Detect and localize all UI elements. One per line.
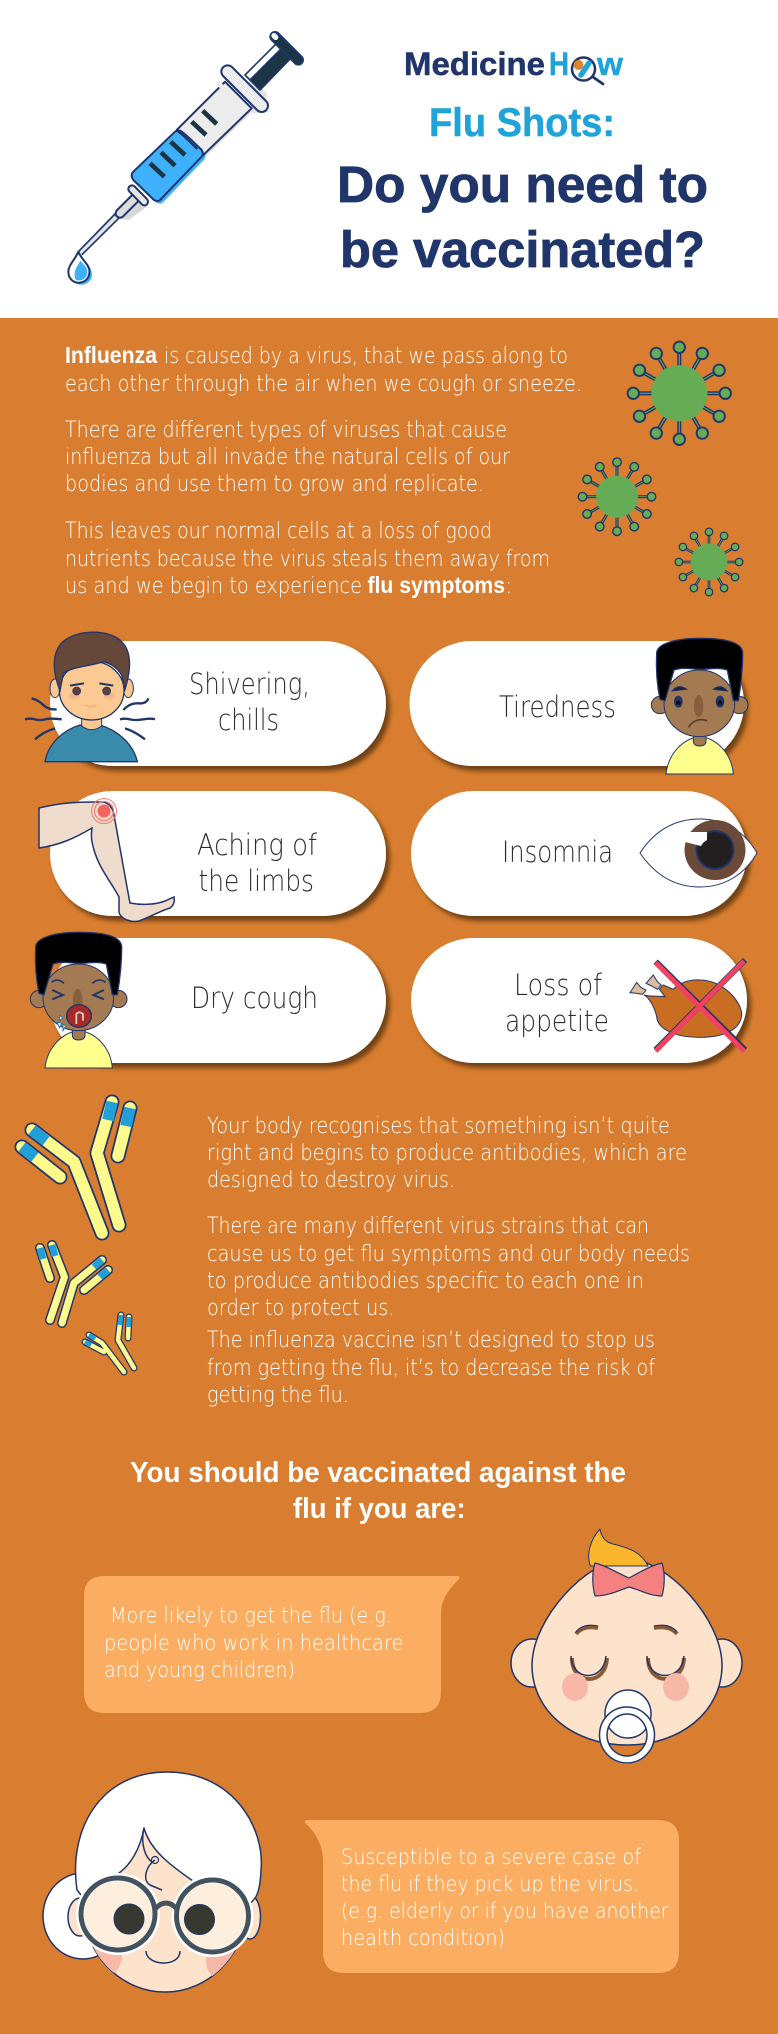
logo: MedicineHow: Medicine (404, 46, 545, 82)
hair (76, 1772, 261, 1905)
text block: antibodies and vaccine: to produce antibodies specific to each one in (207, 1268, 644, 1294)
callout: susceptible to a severe case: the flu if they pick up the virus. (341, 1872, 639, 1897)
text block: antibodies and vaccine: Your body recognises that something isn’t quite (207, 1113, 670, 1139)
heading: who should be vaccinated: You should be vaccinated against the (130, 1457, 626, 1489)
text block: antibodies and vaccine: designed to destroy virus. (207, 1167, 455, 1193)
icon: medium antibody (40, 1245, 108, 1323)
symptom: shivering, chills (25, 632, 386, 766)
symptom: shivering, chills: chills (218, 703, 279, 737)
title: be vaccinated? (340, 221, 705, 278)
logo: MedicineHow: w (596, 46, 623, 82)
symptom: insomnia (411, 791, 757, 916)
text block: antibodies and vaccine: There are many different virus strains that can (207, 1213, 649, 1239)
icon: small virus (675, 528, 743, 596)
header background (0, 0, 778, 318)
icon: baby face (511, 1529, 742, 1763)
callout: more likely to get the flu: and young children) (104, 1658, 295, 1683)
icon: elderly woman face (43, 1772, 261, 1992)
icon: shivering boy (25, 632, 155, 762)
text block: antibodies and vaccine (207, 1113, 690, 1408)
icon: large virus (628, 342, 731, 445)
callout: susceptible to a severe case: health condition) (341, 1926, 505, 1951)
text block: influenza introduction: : (505, 573, 513, 599)
heading: who should be vaccinated (130, 1457, 626, 1525)
symptom: tiredness (410, 638, 748, 774)
glasses (80, 1877, 156, 1951)
text block: influenza introduction: nutrients because the virus steals them away from (65, 546, 550, 572)
text block: influenza introduction: This leaves our normal cells at a loss of good (65, 518, 492, 544)
callout: more likely to get the flu: people who work in healthcare (104, 1631, 404, 1656)
callout: susceptible to a severe case (305, 1820, 679, 1973)
text block: influenza introduction: influenza but all invade the natural cells of our (65, 444, 511, 470)
symptom: tiredness: Tiredness (499, 690, 616, 724)
symptom: loss of appetite (411, 938, 747, 1063)
title (337, 101, 708, 278)
logo: MedicineHow: H (549, 46, 569, 82)
text block: antibodies and vaccine: cause us to get flu symptoms and our body needs (207, 1241, 690, 1267)
icon: medium virus (578, 458, 656, 535)
text block: influenza introduction: each other through the air when we cough or sneeze. (65, 371, 582, 397)
pacifier (605, 1690, 651, 1738)
icon: crossed-out chicken (630, 960, 745, 1051)
icon: large antibody (22, 1102, 130, 1233)
text block: antibodies and vaccine: from getting the flu, it’s to decrease the risk of (207, 1355, 655, 1381)
callout: susceptible to a severe case: Susceptible to a severe case of (341, 1845, 641, 1870)
text block: influenza introduction: us and we begin to experience (65, 573, 362, 599)
symptom: aching of the limbs (39, 791, 386, 921)
text block: influenza introduction: Influenza (65, 342, 157, 368)
symptom: dry cough (30, 932, 386, 1068)
title: Flu Shots: (429, 101, 615, 145)
text block: influenza introduction: is caused by a virus, that we pass along to (164, 343, 568, 369)
heading: who should be vaccinated: flu if you are: (293, 1493, 466, 1525)
symptom: aching of the limbs: the limbs (198, 864, 314, 898)
title: Do you need to (337, 156, 708, 213)
text block: influenza introduction (65, 342, 582, 599)
symptom: aching of the limbs: Aching of (197, 828, 318, 862)
text block: antibodies and vaccine: getting the flu. (207, 1382, 349, 1408)
baby bow (593, 1563, 664, 1596)
text block: influenza introduction: flu symptoms (368, 572, 505, 598)
icon: small antibody (85, 1315, 134, 1372)
symptom: loss of appetite: appetite (505, 1004, 609, 1038)
callout: susceptible to a severe case: (e.g. elderly or if you have another (341, 1899, 669, 1924)
icon: aching leg (39, 798, 174, 921)
callout: more likely to get the flu (84, 1576, 460, 1713)
hair curl (143, 1828, 162, 1890)
text block: antibodies and vaccine: right and begins to produce antibodies, which are (207, 1140, 687, 1166)
icon: tired man (651, 638, 748, 774)
icon: antibodies (22, 1102, 134, 1372)
text block: antibodies and vaccine: order to protect us. (207, 1295, 394, 1321)
logo: MedicineHow (404, 46, 623, 84)
symptom: dry cough: Dry cough (191, 981, 318, 1015)
text block: influenza introduction: There are different types of viruses that cause (65, 417, 507, 443)
symptom: insomnia: Insomnia (502, 835, 613, 869)
text block: antibodies and vaccine: The influenza vaccine isn’t designed to stop us (207, 1327, 655, 1353)
icon: coughing man (30, 932, 127, 1068)
icon: syringe (68, 36, 298, 285)
symptom: loss of appetite: Loss of (514, 968, 603, 1002)
icon: eye (640, 819, 757, 887)
baby hair (589, 1529, 648, 1566)
text block: influenza introduction: bodies and use them to grow and replicate. (65, 471, 484, 497)
symptom: shivering, chills: Shivering, (189, 667, 310, 701)
callout: more likely to get the flu: More likely to get the flu (e.g. (110, 1604, 392, 1628)
